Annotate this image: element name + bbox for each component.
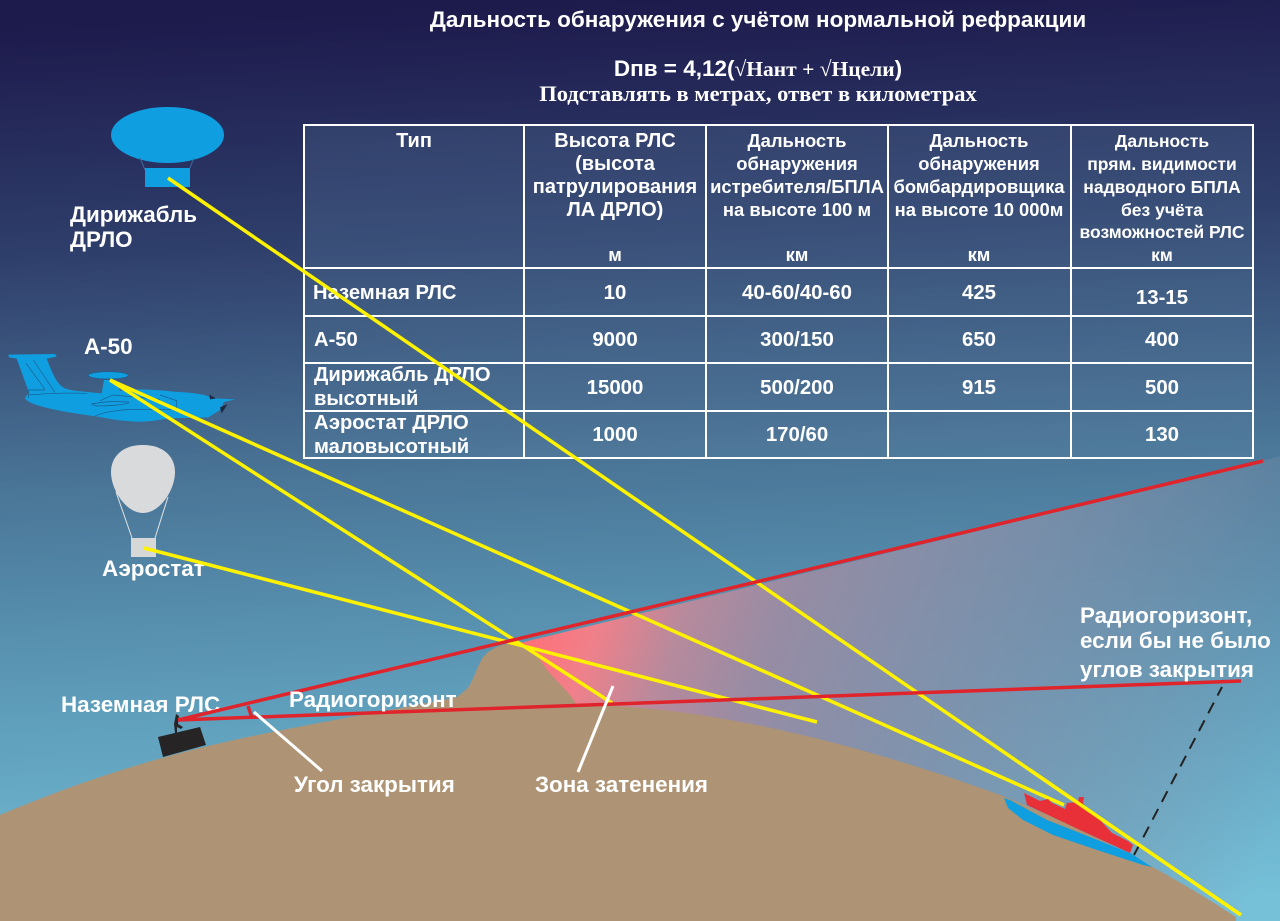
table header: (высота bbox=[575, 153, 656, 175]
label: radio horizon: Радиогоризонт bbox=[289, 687, 457, 712]
label: radio horizon note: если бы не было bbox=[1080, 628, 1271, 653]
table rows: 9000 bbox=[592, 329, 638, 351]
label: aerostat: Аэростат bbox=[102, 556, 205, 581]
table header: Дальность bbox=[1115, 131, 1209, 151]
table rows: 1000 bbox=[592, 424, 638, 446]
label: shadow zone: Зона затенения bbox=[535, 772, 708, 797]
table rows: 130 bbox=[1145, 424, 1179, 446]
table header: Дальность bbox=[930, 130, 1028, 151]
label: radio horizon note: Радиогоризонт, bbox=[1080, 603, 1252, 628]
table header: Тип bbox=[396, 130, 432, 152]
table header: км bbox=[1151, 245, 1173, 265]
shadow zone bbox=[520, 456, 1280, 921]
icon: airship bbox=[111, 107, 224, 187]
table rows: 500/200 bbox=[760, 377, 834, 399]
formula note: Подставлять в метрах, ответ в километрах bbox=[539, 81, 978, 106]
table header: Высота РЛС bbox=[554, 130, 676, 152]
table rows: А-50 bbox=[314, 329, 358, 351]
table header: без учёта bbox=[1121, 200, 1203, 220]
radio horizon dashed line bbox=[1134, 687, 1222, 855]
yellow line over ship bbox=[1030, 770, 1241, 915]
table header: надводного БПЛА bbox=[1083, 177, 1241, 197]
table rows: маловысотный bbox=[314, 436, 469, 458]
table header: на высоте 10 000м bbox=[895, 199, 1063, 220]
icon: aerostat balloon bbox=[111, 445, 175, 557]
table rows: высотный bbox=[314, 388, 418, 410]
table rows: 500 bbox=[1145, 377, 1179, 399]
table header: км bbox=[968, 244, 990, 265]
label: A-50: А-50 bbox=[84, 334, 133, 359]
table header: обнаружения bbox=[918, 153, 1040, 174]
table header: возможностей РЛС bbox=[1079, 222, 1245, 242]
table rows: Дирижабль ДРЛО bbox=[314, 364, 491, 386]
table bbox=[304, 125, 1253, 458]
label: airship: ДРЛО bbox=[70, 227, 133, 252]
table rows: 915 bbox=[962, 377, 996, 399]
icon: A-50 aircraft bbox=[8, 354, 235, 422]
table header: патрулирования bbox=[533, 176, 697, 198]
table header bbox=[396, 130, 1245, 265]
table header: истребителя/БПЛА bbox=[710, 176, 884, 197]
table rows: Аэростат ДРЛО bbox=[314, 412, 469, 434]
table rows: 13-15 bbox=[1136, 287, 1188, 309]
red radar lines bbox=[178, 461, 1263, 720]
table header: м bbox=[608, 244, 622, 265]
label: airship: Дирижабль bbox=[70, 202, 197, 227]
table header: бомбардировщика bbox=[893, 176, 1065, 197]
table header: прям. видимости bbox=[1087, 154, 1237, 174]
table rows: 400 bbox=[1145, 329, 1179, 351]
title: Дальность обнаружения с учётом нормальной рефракции bbox=[430, 7, 1086, 32]
label: radio horizon note: углов закрытия bbox=[1080, 657, 1254, 682]
pointer: closure angle bbox=[254, 712, 322, 771]
table header: обнаружения bbox=[736, 153, 858, 174]
table header: ЛА ДРЛО) bbox=[567, 199, 663, 221]
table rows: 170/60 bbox=[766, 424, 828, 446]
label: closure angle: Угол закрытия bbox=[294, 772, 455, 797]
table rows: 650 bbox=[962, 329, 996, 351]
table header: Дальность bbox=[748, 130, 846, 151]
table rows: 40-60/40-60 bbox=[742, 282, 852, 304]
table rows: 10 bbox=[604, 282, 626, 304]
formula: Dпв = 4,12(√Нант + √Нцели) bbox=[614, 56, 902, 81]
table header: км bbox=[786, 244, 808, 265]
label: ground radar: Наземная РЛС bbox=[61, 692, 220, 717]
table rows bbox=[313, 282, 1188, 458]
table rows: 300/150 bbox=[760, 329, 834, 351]
icon: ground radar bbox=[158, 714, 206, 757]
table rows: Наземная РЛС bbox=[313, 282, 457, 304]
table rows: 425 bbox=[962, 282, 996, 304]
icon: ship bbox=[1004, 793, 1152, 867]
pointer: shadow zone bbox=[578, 686, 613, 772]
earth surface and hill bbox=[0, 643, 1236, 921]
table header: на высоте 100 м bbox=[723, 199, 871, 220]
table rows: 15000 bbox=[587, 377, 643, 399]
yellow sight lines bbox=[110, 178, 1241, 915]
